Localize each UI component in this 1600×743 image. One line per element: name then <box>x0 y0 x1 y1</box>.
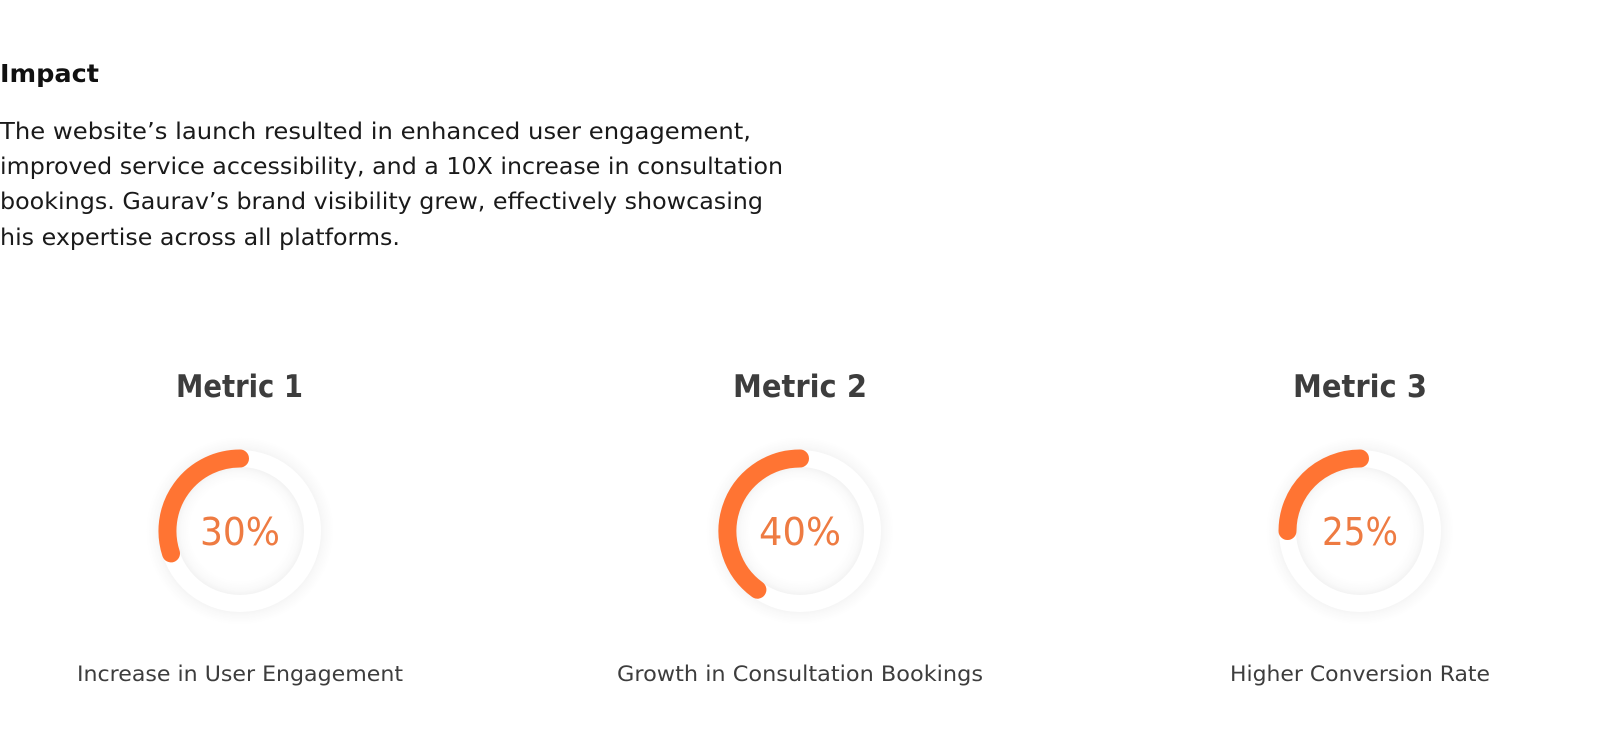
text block: impact description: bookings. Gaurav’s brand visibility grew, effectively showcasing <box>0 187 763 215</box>
text block: impact description: his expertise across all platforms. <box>0 223 400 251</box>
donut chart: 40%: 40% <box>759 510 841 554</box>
panel: metric 1 <box>77 369 403 687</box>
heading: Impact: Impact <box>0 59 99 88</box>
metric 3 caption: Higher Conversion Rate <box>1230 662 1490 687</box>
metric 2 caption: Growth in Consultation Bookings <box>617 662 983 687</box>
text block: impact description: The website’s launch resulted in enhanced user engagement, <box>0 117 751 145</box>
donut chart: 30%: 30% <box>200 510 280 554</box>
donut chart: 25%: 25% <box>1322 510 1398 554</box>
panel: metric 3 <box>1230 369 1490 687</box>
metric 1 caption: Increase in User Engagement <box>77 662 403 687</box>
text block: impact description: improved service accessibility, and a 10X increase in consultation <box>0 152 783 180</box>
metric 3 title: Metric 3 <box>1293 369 1427 405</box>
metric 2 title: Metric 2 <box>733 369 867 405</box>
metric 1 title: Metric 1 <box>176 369 303 405</box>
donut chart: 25% <box>1266 437 1454 625</box>
donut chart: 40% <box>706 437 894 625</box>
panel: metric 2 <box>617 369 983 687</box>
donut chart: 30% <box>146 437 334 625</box>
text block: impact description <box>0 117 783 251</box>
